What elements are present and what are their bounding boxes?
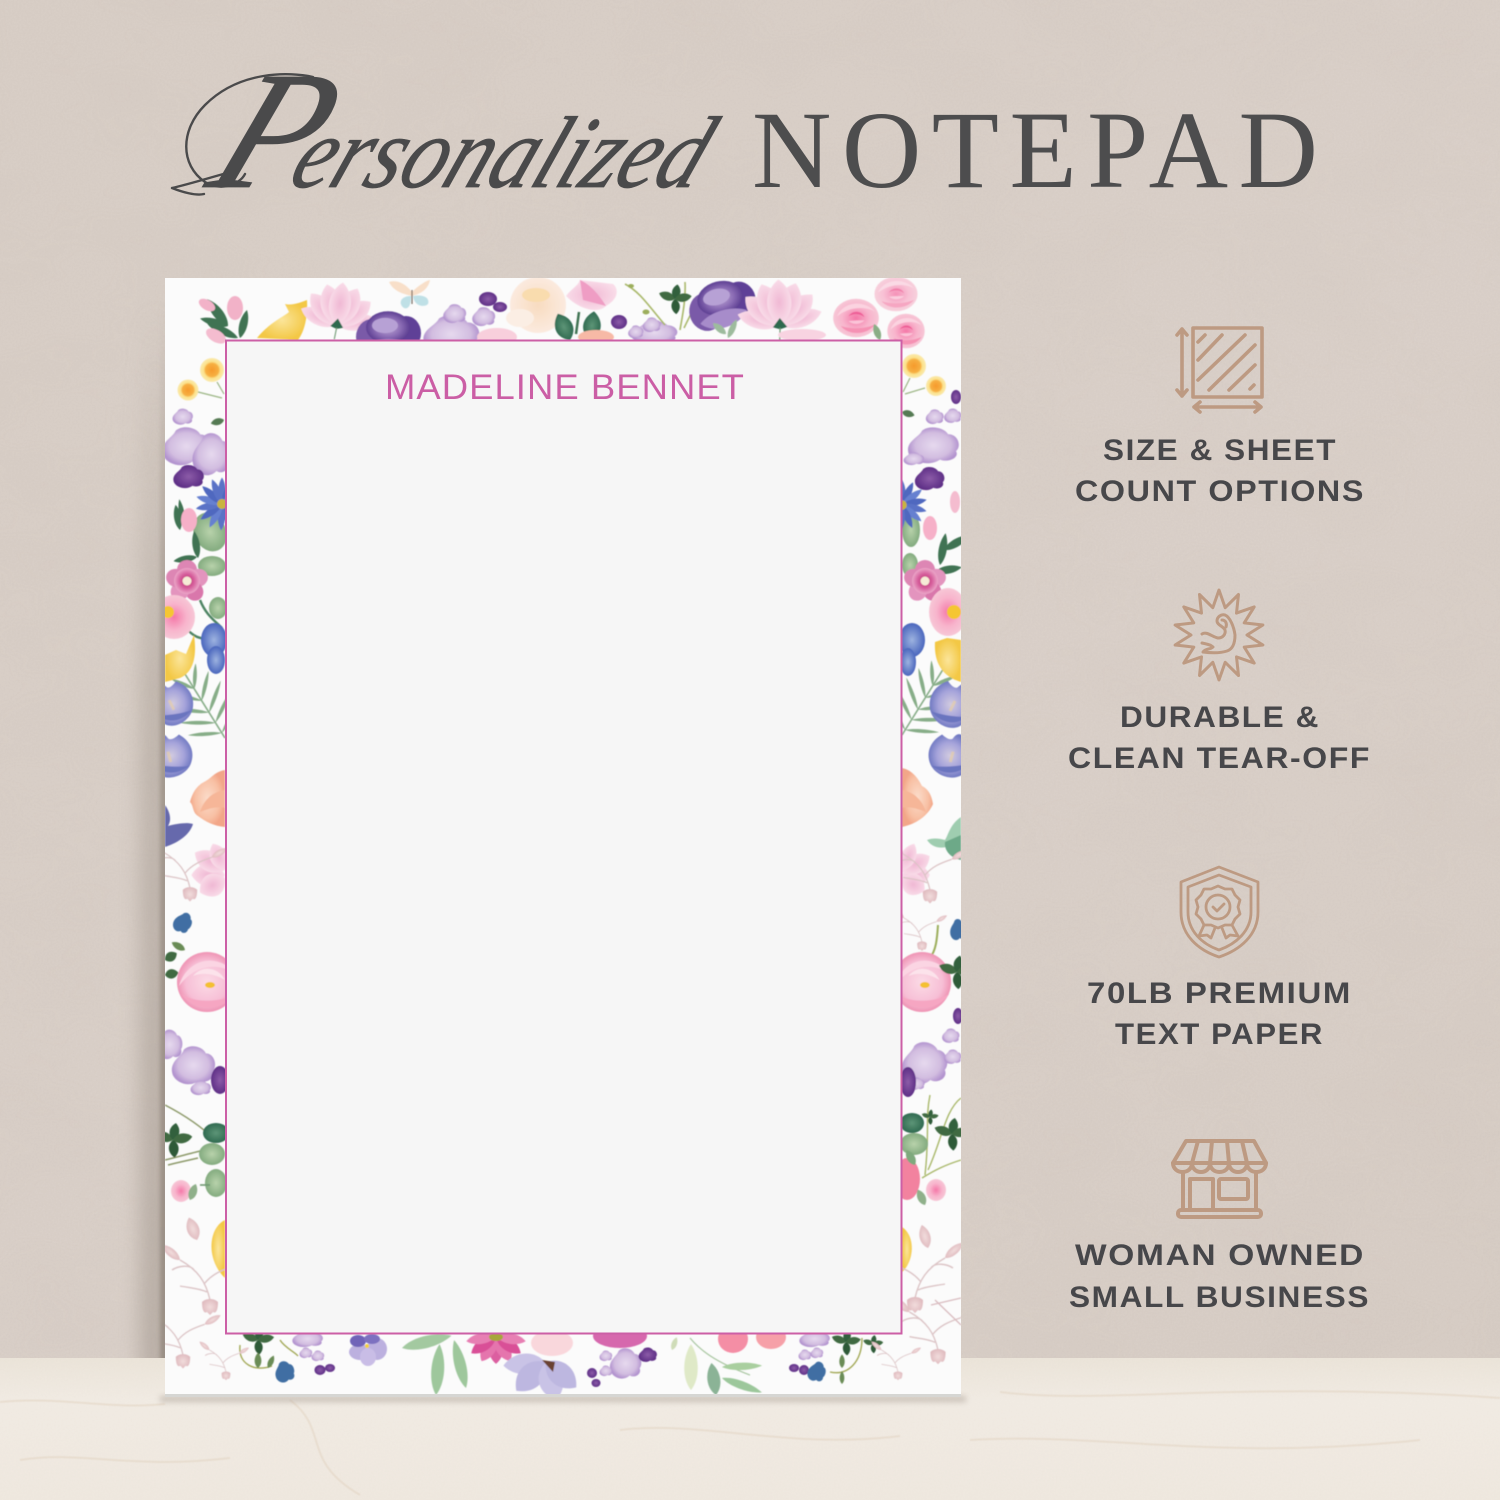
pink tulip and green leaves — [554, 280, 617, 340]
rose bud right — [914, 1179, 946, 1207]
title — [172, 37, 1318, 224]
magenta flower right — [902, 560, 948, 604]
pink lotus left side — [190, 840, 233, 902]
deep purple bloom right — [915, 390, 961, 490]
yellow tulip right — [935, 638, 961, 682]
cream peony — [506, 277, 566, 333]
yellow tulip left — [165, 635, 195, 682]
purple buds — [479, 292, 507, 312]
blue flower bottom left — [273, 1360, 296, 1384]
yellow orange blossoms right — [902, 354, 946, 396]
purple bud — [611, 315, 627, 329]
clover vine bottom left — [240, 1325, 298, 1369]
icon: muscle burst — [1175, 590, 1263, 680]
blue flower left — [201, 623, 227, 674]
marble floor — [0, 1358, 1500, 1500]
blue aster right — [877, 480, 927, 530]
peony right — [893, 952, 951, 1012]
deep purple bloom left — [173, 465, 204, 488]
pink blossom with yellow center left — [153, 595, 195, 639]
lilac clusters right — [904, 409, 961, 465]
lilac clusters lower left — [157, 1030, 215, 1095]
fern left — [156, 654, 252, 755]
label: durable: CLEAN TEAR-OFF — [1068, 742, 1371, 775]
blue flower and sprig right — [891, 907, 965, 958]
icon: storefront — [1173, 1141, 1266, 1217]
feature: premium paper — [1087, 867, 1352, 1051]
yellow bloom behind sprig left — [211, 1220, 225, 1278]
lilac blooms right — [628, 316, 678, 340]
pale sprigs lower left — [137, 1216, 253, 1368]
dark leaf right — [901, 409, 915, 419]
notepad — [137, 273, 979, 1403]
green sprig with clover — [625, 282, 700, 330]
top border flowers — [198, 278, 926, 349]
pink rose sliver right — [894, 1158, 920, 1200]
lilac blooms left — [422, 304, 518, 340]
pink lotus right — [737, 280, 822, 340]
pale sprig bottom left — [198, 1340, 250, 1380]
peach rose right — [902, 768, 933, 827]
peach flower sliver — [578, 329, 614, 340]
violet tulips left — [146, 681, 197, 782]
butterfly, top — [389, 280, 430, 308]
rose bud left — [171, 1180, 200, 1202]
peony left — [177, 952, 237, 1012]
purple buds bottom left — [314, 1364, 335, 1375]
clover vine bottom right — [830, 1328, 884, 1384]
purple rose left — [355, 310, 422, 340]
greenery lower right — [900, 1095, 971, 1178]
deep purple sliver right — [900, 1008, 963, 1097]
pink blossom with yellow center right — [929, 588, 967, 636]
butterfly left — [165, 805, 193, 847]
magenta flower left — [164, 560, 210, 604]
title serif word: NOTEPAD — [752, 89, 1318, 211]
label: size and sheet: SIZE & SHEET — [1103, 434, 1337, 467]
floral border — [137, 273, 979, 1403]
violet tulips right — [924, 681, 975, 782]
icon: size square — [1177, 328, 1262, 412]
blue flower right — [899, 623, 925, 676]
clover right upper — [937, 955, 977, 989]
green round leaf left — [209, 597, 227, 619]
pale leaves and stem bottom — [669, 1336, 763, 1396]
label: woman owned: WOMAN OWNED — [1075, 1239, 1365, 1272]
paper bottom edge — [165, 1394, 961, 1397]
lilac bloom bottom left — [292, 1330, 324, 1361]
small sage leaves — [712, 320, 738, 338]
purple rose right — [688, 280, 756, 332]
pale sprig bottom right — [870, 1340, 922, 1380]
label: premium paper: 70LB PREMIUM — [1087, 977, 1352, 1010]
green leaf right — [903, 1148, 919, 1167]
pale pink sprig left — [144, 835, 229, 902]
yellow orange blossoms left — [178, 358, 224, 400]
purple buds and blue flower bottom right — [789, 1359, 829, 1384]
lilac bloom bottom right — [599, 1348, 641, 1379]
fern right — [875, 651, 971, 752]
feature: woman owned — [1069, 1141, 1370, 1314]
left border flowers — [137, 358, 253, 1368]
right border flowers — [872, 354, 979, 1364]
blue flower and leaves left — [163, 909, 196, 980]
label: premium paper: TEXT PAPER — [1115, 1018, 1324, 1051]
label: durable: DURABLE & — [1120, 701, 1320, 734]
pink roses bottom — [718, 1325, 786, 1353]
violet lotus bottom — [503, 1352, 584, 1403]
label: size and sheet: COUNT OPTIONS — [1075, 475, 1365, 508]
green leaves and bud right — [902, 491, 971, 577]
greenery lower left — [153, 1105, 229, 1197]
personalized name: MADELINE BENNET — [385, 368, 745, 407]
dark leaf left — [210, 417, 224, 426]
background wall — [128, 307, 165, 1358]
green stems left — [186, 600, 222, 640]
green butterfly right — [927, 817, 961, 860]
writing area — [226, 340, 902, 1334]
pale sprigs lower right — [872, 1224, 979, 1364]
deep purple bloom bottom — [587, 1348, 657, 1387]
green leaves bottom center — [401, 1330, 472, 1395]
blue aster left — [195, 477, 249, 531]
pink lotus right side — [895, 840, 934, 900]
pink lotus left — [300, 282, 372, 340]
peach rose left — [190, 770, 225, 827]
paper sheet — [165, 278, 961, 1397]
feature: durable tear-off — [1068, 590, 1371, 775]
bottom border flowers — [198, 1324, 922, 1403]
deep purple sliver left — [211, 1066, 229, 1094]
title script word: ersonalized — [277, 96, 732, 209]
pink blush bloom — [778, 329, 826, 341]
yellow tulip — [257, 300, 307, 340]
lilac clusters left — [162, 409, 231, 475]
tulip buds and leaves, top left — [198, 296, 249, 344]
lilac clusters lower right — [902, 1029, 961, 1090]
magenta daisy — [465, 1331, 527, 1365]
label: woman owned: SMALL BUSINESS — [1069, 1281, 1370, 1314]
title script word: P — [187, 37, 366, 224]
green leaves and bud left — [172, 499, 233, 576]
magenta peony bottom — [593, 1324, 647, 1348]
yellow bloom sliver right — [902, 1227, 912, 1272]
blush peach bloom bottom — [531, 1330, 573, 1356]
pink roses top right — [833, 277, 925, 348]
feature: size and sheet count — [1075, 328, 1365, 508]
icon: shield with rosette — [1181, 867, 1258, 957]
pale pink sprig right — [884, 837, 969, 904]
pansy — [349, 1334, 387, 1366]
lilac bloom bottom far right — [798, 1330, 830, 1360]
